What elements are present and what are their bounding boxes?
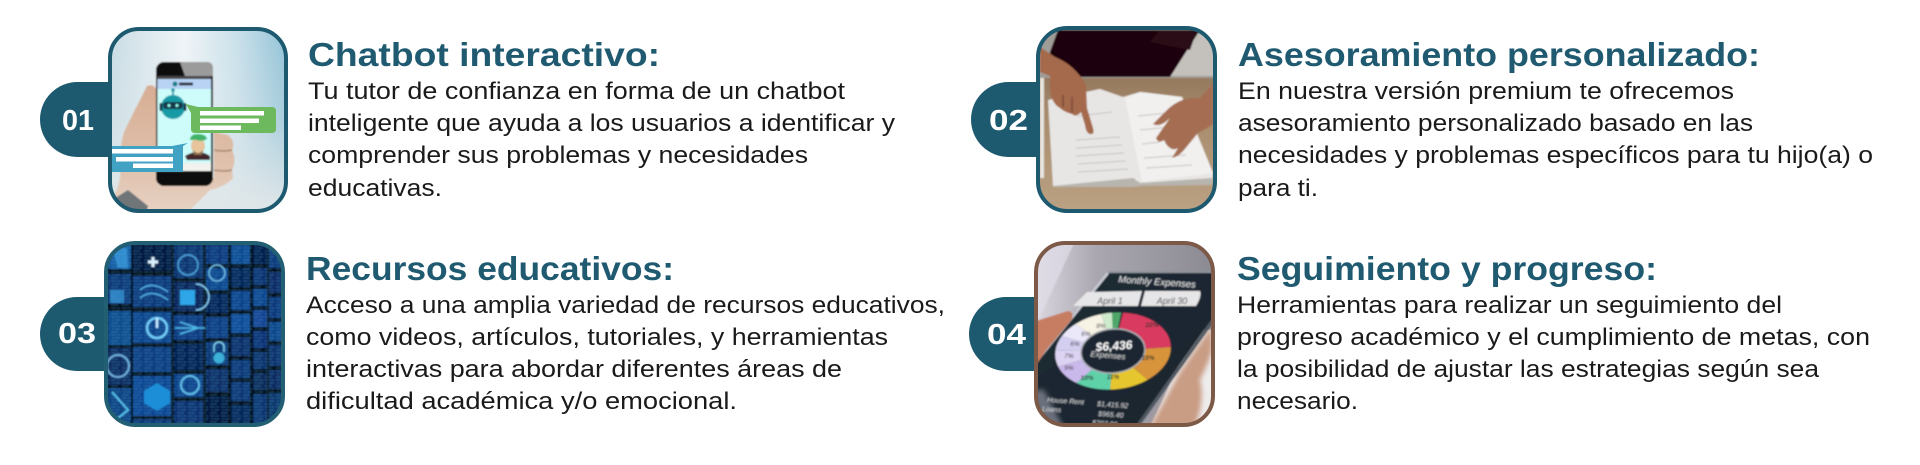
image: phone showing a monthly expenses donut chart: 6% [1081, 331, 1091, 338]
image: wall of blue technology screens [104, 241, 285, 427]
image: phone showing a monthly expenses donut chart: $1,415.92 [1096, 401, 1129, 410]
image: phone showing a monthly expenses donut chart: $707.96 [1091, 420, 1118, 429]
body text: necesario. [1237, 388, 1358, 415]
chat bubble: blue [108, 143, 188, 172]
body text: En nuestra versión premium te ofrecemos [1238, 78, 1734, 105]
body text: Tu tutor de confianza en forma de un chatbot [308, 78, 845, 105]
image: phone showing a monthly expenses donut chart: 11% [1107, 374, 1119, 381]
body text: para ti. [1238, 175, 1318, 202]
image: phone showing a monthly expenses donut chart: 7% [1064, 353, 1074, 360]
image frame [1036, 243, 1213, 425]
heading: Recursos educativos: [306, 250, 674, 287]
number 01: 01 [62, 105, 94, 137]
image frame [106, 243, 283, 425]
body text: dificultad académica y/o emocional. [306, 388, 737, 415]
body text: asesoramiento personalizado basado en las [1238, 110, 1753, 137]
heading: Asesoramiento personalizado: [1238, 36, 1760, 73]
image: phone showing a monthly expenses donut chart: Loans [1042, 406, 1062, 414]
image: phone showing a monthly expenses donut chart: 6% [1070, 341, 1080, 348]
body text: inteligente que ayuda a los usuarios a identificar y [308, 110, 895, 137]
body text [308, 78, 895, 202]
image: phone showing a monthly expenses donut chart: 10% [1080, 375, 1094, 382]
image: phone showing a monthly expenses donut chart: House Rent [1047, 397, 1085, 407]
body text: como videos, artículos, tutoriales, y herramientas [306, 324, 888, 351]
body text [1237, 292, 1870, 415]
number 02: 02 [989, 105, 1028, 137]
image: phone showing a monthly expenses donut chart: Monthly Expenses [1118, 274, 1196, 291]
image: phone showing a monthly expenses donut chart: April 1 [1096, 296, 1123, 306]
image: hands on an open book [1036, 26, 1217, 213]
body text: educativas. [308, 175, 442, 202]
body text: la posibilidad de ajustar las estrategias según sea [1237, 356, 1820, 383]
image: phone showing a monthly expenses donut chart: April 30 [1156, 296, 1187, 306]
image: phone showing a monthly expenses donut chart [1034, 241, 1215, 430]
body text: comprender sus problemas y necesidades [308, 142, 808, 169]
image: phone with chatbot held in a hand [108, 27, 288, 213]
image: phone showing a monthly expenses donut chart: 9% [1064, 365, 1074, 372]
image: phone showing a monthly expenses donut chart: Expenses [1090, 349, 1126, 362]
panel: 04 seguimiento y progreso [969, 241, 1870, 430]
image frame [110, 29, 286, 211]
body text: progreso académico y el cumplimiento de metas, con [1237, 324, 1870, 351]
heading: Chatbot interactivo: [308, 36, 660, 73]
image: phone showing a monthly expenses donut chart: 15% [1141, 355, 1155, 362]
body text: necesidades y problemas específicos para tu hijo(a) o [1238, 142, 1873, 169]
number 03: 03 [58, 318, 96, 350]
image: phone showing a monthly expenses donut chart: 8% [1096, 323, 1106, 330]
body text: interactivas para abordar diferentes áreas de [306, 356, 842, 383]
image: phone showing a monthly expenses donut chart: $6,436 [1094, 338, 1133, 354]
panel: 03 recursos educativos [40, 241, 945, 427]
panel: 01 chatbot interactivo [40, 27, 895, 213]
body text: Acceso a una amplia variedad de recursos educativos, [306, 292, 945, 319]
image: phone showing a monthly expenses donut chart: $965.40 [1097, 411, 1124, 420]
body text: Herramientas para realizar un seguimiento del [1237, 292, 1782, 319]
panel: 02 asesoramiento personalizado [971, 26, 1873, 213]
body text [1238, 78, 1873, 202]
number pill 02 [971, 82, 1060, 157]
number 04: 04 [987, 319, 1026, 351]
number pill 01 [40, 82, 130, 157]
image frame [1038, 28, 1215, 211]
chat bubble: green [186, 104, 276, 133]
number pill 04 [969, 297, 1058, 371]
heading: Seguimiento y progreso: [1237, 250, 1657, 287]
image: phone showing a monthly expenses donut chart: 22% [1144, 322, 1159, 329]
number pill 03 [40, 297, 125, 371]
body text [306, 292, 945, 415]
